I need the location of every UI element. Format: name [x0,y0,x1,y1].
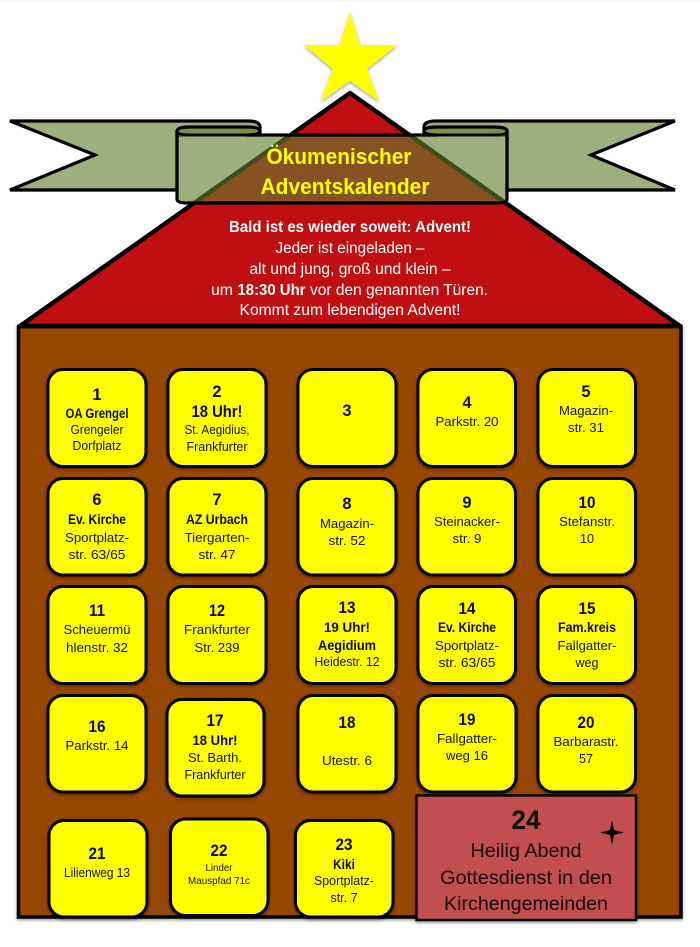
door 10: 10 [578,494,596,512]
door 10: Stefanstr. [559,514,615,529]
door 15: Fallgatter- [558,638,616,653]
invitation text: um [211,282,233,299]
door 19 [418,696,516,792]
door 10 [538,478,636,575]
door 16: Parkstr. 14 [66,738,128,753]
invitation text: Jeder ist eingeladen – [276,240,425,257]
door 13 [298,586,396,684]
door 13: 13 [338,599,356,617]
door 7: Tiergarten- [184,530,250,545]
door 13: 19 Uhr! [324,620,370,635]
door 23: str. 7 [330,890,358,905]
door 12: Frankfurter [184,622,251,637]
door 24 [416,796,636,920]
door 14: str. 63/65 [438,655,496,670]
banner left tail [10,121,260,190]
door 2: 2 [212,383,222,401]
invitation text [211,219,488,319]
door 22 [170,819,268,916]
door 6: Ev. Kirche [68,512,126,527]
banner right tail [424,121,675,190]
door 7: str. 47 [198,547,236,562]
door 17: Frankfurter [184,767,246,782]
door 19: Fallgatter- [437,731,497,746]
door 23 [296,820,393,917]
invitation text: Kommt zum lebendigen Advent! [240,302,460,319]
door 6: 6 [92,491,102,509]
door 4: 4 [462,394,472,412]
door 18 [298,696,396,792]
door 11: Scheuermü [64,622,130,637]
door 1 [48,370,146,466]
door 5: str. 31 [568,420,604,435]
door 6: str. 63/65 [68,547,126,562]
door 1: Grengeler [70,422,124,437]
door 14: Ev. Kirche [438,620,496,635]
door 16: 16 [88,718,106,736]
door 15 [538,586,636,684]
door 23: Sportplatz- [314,873,374,888]
door 23: 23 [336,836,352,854]
door 13: Aegidium [318,638,376,653]
door 15: weg [575,655,598,670]
invitation text: vor den genannten Türen. [310,282,488,299]
door 8: str. 52 [328,533,366,548]
roof [20,93,680,326]
door 4: Parkstr. 20 [436,414,498,429]
door 22: Mauspfad 71c [188,875,250,887]
door 14 [418,586,516,684]
door 19: 19 [458,711,476,729]
door 2: 18 Uhr! [192,403,242,421]
invitation text: 18:30 Uhr [238,282,306,299]
door 3: 3 [342,402,352,420]
invitation text: alt und jung, groß und klein – [250,261,451,278]
door 5: 5 [581,383,591,401]
door 16 [48,696,146,792]
door 20 [538,696,636,792]
door 24: 24 [512,805,540,835]
door 23: Kiki [333,857,355,872]
door 21: Lilienweg 13 [64,865,130,880]
door 17: 17 [206,712,224,730]
door 22: 22 [210,842,228,860]
door 9 [418,478,516,575]
door 21: 21 [88,845,106,863]
door 20: 57 [579,751,593,766]
invitation text: Bald ist es wieder soweit: Advent! [229,219,471,236]
door 24: Heilig Abend [470,841,582,862]
title: Ökumenischer [266,144,412,169]
banner [10,121,675,203]
door 5: Magazin- [559,403,613,418]
door 17: St. Barth. [188,750,242,765]
door 11: 11 [89,602,105,620]
door 13: Heidestr. 12 [314,654,380,669]
door 1: 1 [92,386,102,404]
door 2: Frankfurter [186,439,248,454]
door 8: 8 [342,495,352,513]
door 12: Str. 239 [194,640,240,655]
door 6 [48,478,146,575]
star on top of roof [304,12,397,101]
door 7: 7 [212,491,222,509]
door 7 [168,478,266,575]
door 18: Utestr. 6 [322,753,372,768]
door 20: Barbarastr. [554,734,618,749]
door 8 [298,478,396,575]
door 24: Kirchengemeinden [444,894,608,915]
door 19: weg 16 [445,748,488,763]
door 4 [418,370,516,466]
door 20: 20 [578,714,594,732]
door 12: 12 [209,602,225,620]
door 15: 15 [578,600,596,618]
title: Adventskalender [260,174,430,199]
banner centre [177,127,507,203]
door 17: 18 Uhr! [192,733,238,748]
door 9: str. 9 [452,531,482,546]
door 9: 9 [462,494,472,512]
door 24: Gottesdienst in den [440,868,612,889]
door 18: 18 [338,714,356,732]
door 14: Sportplatz- [435,638,499,653]
house body [18,326,681,917]
door 21 [49,820,147,917]
door 7: AZ Urbach [186,512,248,527]
door 15: Fam.kreis [558,620,616,635]
door 12 [168,586,266,684]
door 5 [538,370,636,466]
door 11 [48,586,146,684]
door 17 [167,700,264,796]
door 2: St. Aegidius, [184,422,250,437]
door 11: hlenstr. 32 [66,640,128,655]
door 2 [168,370,266,466]
icon: four-point star [600,820,624,845]
door 1: OA Grengel [66,406,128,421]
door 14: 14 [458,600,476,618]
door 9: Steinacker- [434,514,500,529]
door 6: Sportplatz- [65,530,129,545]
door 22: Linder [206,862,233,874]
door 3 [298,370,396,466]
door 10: 10 [580,531,594,546]
door 1: Dorfplatz [72,438,122,453]
door 8: Magazin- [320,516,374,531]
